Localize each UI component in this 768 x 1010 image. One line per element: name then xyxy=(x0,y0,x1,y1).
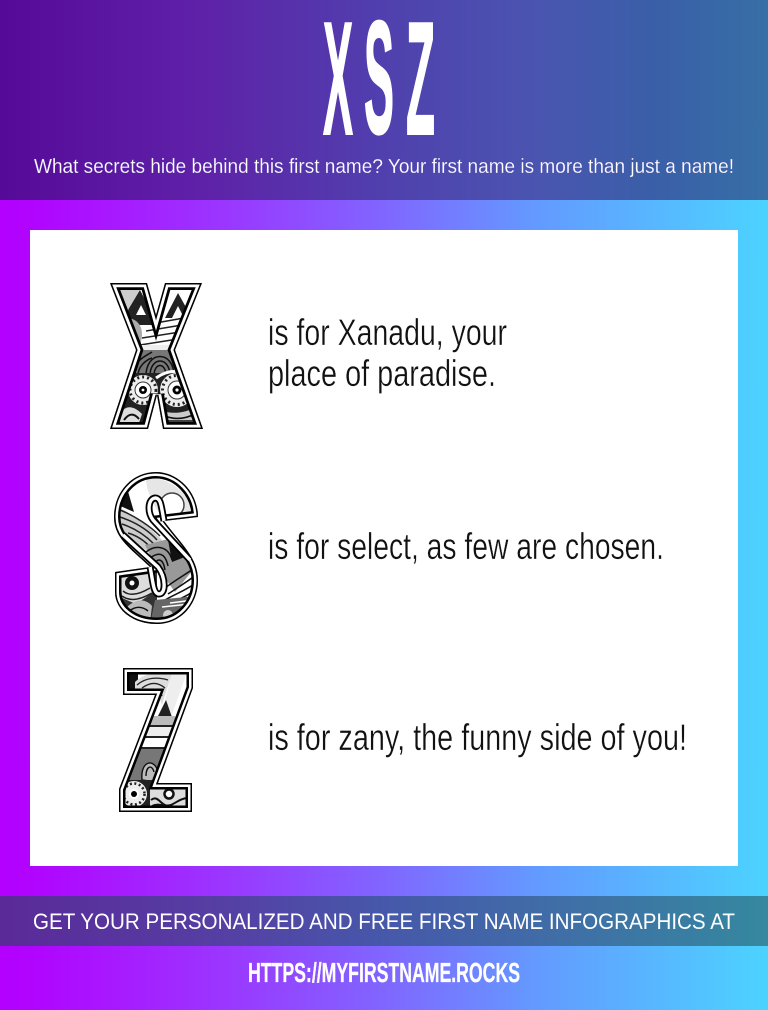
icon: decorated letter S xyxy=(114,472,198,624)
footer call to action: GET YOUR PERSONALIZED AND FREE FIRST NAME INFOGRAPHICS AT xyxy=(33,909,735,934)
icon: decorated letter X xyxy=(110,283,203,429)
footer url: HTTPS://MYFIRSTNAME.ROCKS xyxy=(248,957,520,988)
panel: white letters panel xyxy=(30,230,738,866)
footer band xyxy=(0,896,768,946)
icon: decorated letter Z xyxy=(119,668,193,812)
flower left xyxy=(128,375,158,405)
flower right xyxy=(160,373,194,407)
header band xyxy=(0,0,768,200)
header tagline: What secrets hide behind this first name? Your first name is more than just a name! xyxy=(34,156,734,178)
text: X line: is for Xanadu, your xyxy=(268,312,507,353)
upper and lower spine loops xyxy=(123,498,190,594)
text: X line: place of paradise. xyxy=(268,353,496,394)
